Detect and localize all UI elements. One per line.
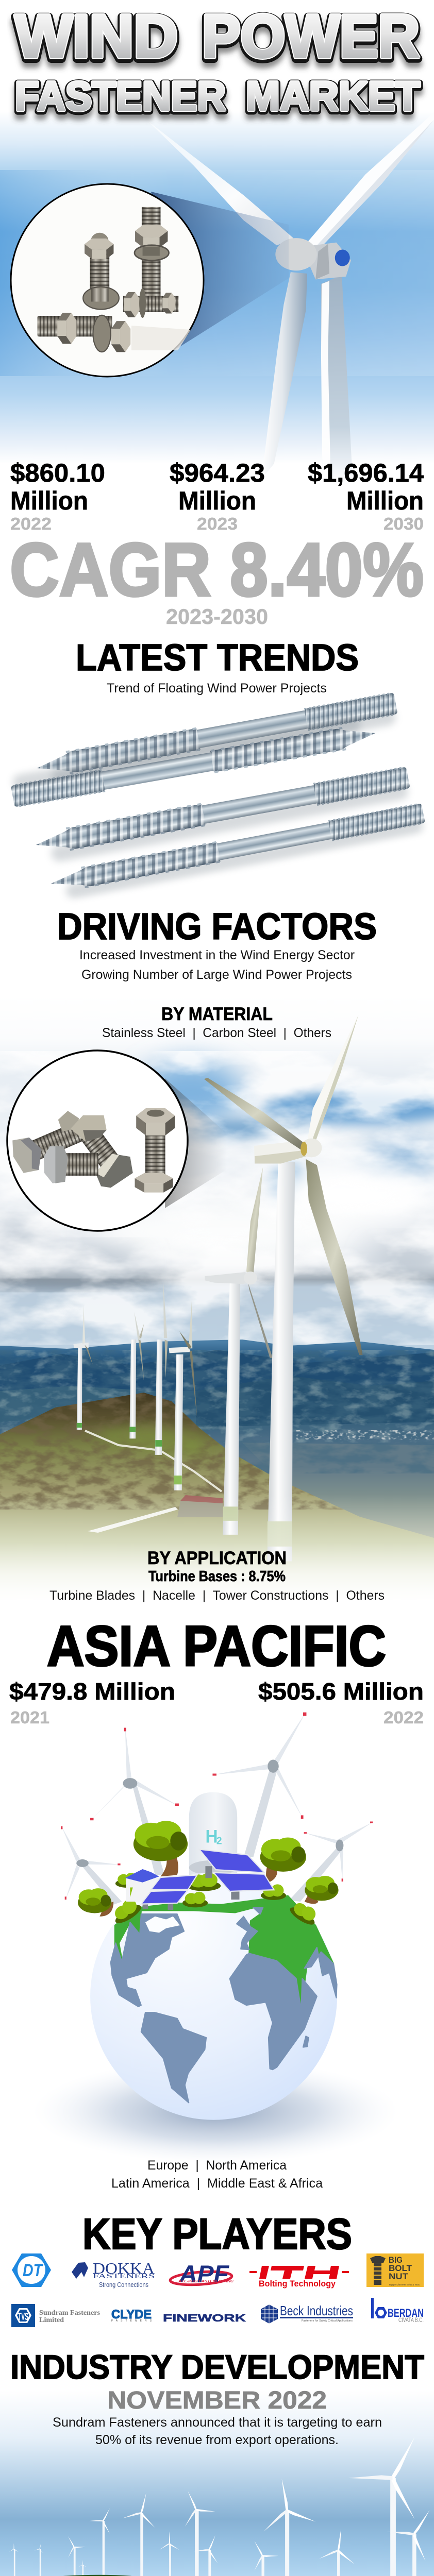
near ridges — [0, 1350, 434, 1468]
logo: Dokka Fasteners: FASTENERS — [93, 2272, 155, 2280]
cloud texture — [0, 1051, 434, 1345]
title: wind power fastener market: MARKET — [246, 73, 420, 119]
logo: Dokka Fasteners: Strong Connections — [99, 2281, 148, 2289]
white fade — [0, 1494, 434, 1602]
grassy hilltop — [88, 1425, 206, 1455]
logo: Finework: FINEWORK — [163, 2313, 246, 2324]
turbine B — [212, 1712, 306, 1857]
market value 2023: 2023 — [197, 514, 238, 533]
logo: All-Pro Fasteners: APF — [179, 2260, 229, 2287]
title: wind power fastener market: WIND — [15, 3, 178, 71]
white road — [88, 1507, 178, 1533]
image: threaded screws — [9, 692, 427, 902]
title: wind power fastener market: MARKET — [246, 74, 420, 120]
logo: Beck Industries: Fasteners for Safety Critical Applications — [302, 2319, 353, 2323]
title: wind power fastener market: FASTENER — [15, 73, 226, 119]
heading: latest trends: LATEST TRENDS — [76, 637, 359, 679]
regional value 2022: 2022 — [383, 1708, 424, 1727]
logo: TVS Sundram Fasteners: TVS — [18, 2311, 28, 2323]
logo: Dokka Fasteners — [72, 2259, 155, 2289]
hero sky background — [0, 0, 434, 464]
market value 2030: 2030 — [383, 514, 424, 533]
logo: Dokka Fasteners: DOKKA — [93, 2259, 155, 2277]
regions list: Latin America | Middle East & Africa — [111, 2176, 323, 2191]
logo: Oberdan Civata: CIVATA B.C. — [398, 2316, 424, 2324]
regional value 2022: $505.6 Million — [258, 1678, 424, 1705]
heading: driving factors: DRIVING FACTORS — [57, 906, 377, 947]
latest trends text: Trend of Floating Wind Power Projects — [107, 681, 327, 696]
bottom sky — [0, 2391, 434, 2576]
heading: by material: BY MATERIAL — [161, 1004, 273, 1024]
hill texture — [0, 1393, 344, 1510]
logo: Beck Industries: Beck Industries — [280, 2303, 353, 2318]
mountain texture — [0, 1350, 434, 1473]
heading: key players: KEY PLAYERS — [82, 2210, 352, 2258]
turbine A — [90, 1727, 179, 1875]
regional value 2021: 2021 — [10, 1708, 49, 1727]
logo: Oberdan Civata — [371, 2298, 424, 2324]
farmhouse — [177, 1495, 223, 1517]
farm road — [85, 1431, 222, 1492]
ground shadow — [33, 2060, 398, 2163]
regions list — [111, 2158, 323, 2191]
hill — [0, 1393, 434, 1602]
market value 2023: $964.23 — [170, 459, 265, 487]
development description: Sundram Fasteners announced that it is targeting to earn — [53, 2415, 382, 2430]
callout circle: hex bolts — [7, 1050, 188, 1231]
logo: DT: DT — [23, 2261, 44, 2280]
title: wind power fastener market: POWER — [202, 4, 420, 72]
logo: Clyde Fasteners: CLYDE — [111, 2308, 152, 2321]
trees and bushes — [78, 1821, 339, 1928]
driving factors list — [79, 948, 355, 982]
regions list: Europe | North America — [147, 2158, 287, 2173]
logo: Big Bolt Nut: NUT — [389, 2272, 409, 2281]
logo: Beck Industries — [261, 2303, 353, 2324]
market value 2023: Million — [178, 486, 256, 515]
market value 2022: 2022 — [10, 514, 52, 533]
market value 2022 — [10, 459, 105, 533]
regional value 2021 — [9, 1678, 175, 1727]
market value 2030: Million — [346, 486, 424, 515]
illustration: green energy globe — [33, 1712, 398, 2163]
title: wind power fastener market: POWER — [202, 3, 420, 71]
development description: 50% of its revenue from export operations. — [95, 2433, 339, 2447]
market value 2030: $1,696.14 — [308, 459, 424, 487]
panel: hero with turbine and title — [0, 0, 434, 485]
solar panels — [141, 1849, 274, 1910]
driving factors list: Growing Number of Large Wind Power Projects — [81, 968, 352, 982]
regional value 2022 — [258, 1678, 424, 1727]
regional value 2021: $479.8 Million — [9, 1678, 175, 1705]
logo: TVS Sundram Fasteners — [11, 2304, 101, 2327]
market value 2022: Million — [10, 486, 88, 515]
mountains — [0, 1340, 434, 1551]
heading: asia pacific: ASIA PACIFIC — [47, 1615, 386, 1678]
valley fields texture — [0, 1350, 434, 1443]
title: wind power fastener market: FASTENER — [15, 73, 226, 119]
logo: ITH Bolting Technology — [249, 2266, 349, 2289]
callout wedge to bolts — [165, 1078, 227, 1208]
title: wind power fastener market: WIND — [15, 4, 178, 72]
turbine C — [61, 1826, 122, 1905]
title: wind power fastener market: WIND — [15, 3, 178, 71]
foreground large turbine — [204, 1015, 362, 1561]
hydrogen tank: 2 — [216, 1835, 222, 1847]
hydrogen tank — [189, 1792, 237, 1878]
title: wind power fastener market: FASTENER — [15, 74, 226, 120]
driving factors list: Increased Investment in the Wind Energy Sector — [79, 948, 355, 962]
material segments: Stainless Steel | Carbon Steel | Others — [102, 1026, 331, 1040]
title: wind power fastener market: POWER — [202, 3, 420, 71]
charging station — [125, 1869, 159, 1902]
sky tint — [0, 170, 434, 376]
turbine D — [289, 1822, 373, 1902]
panel: company logos — [11, 2253, 424, 2327]
market value 2030 — [308, 459, 424, 533]
logo: Big Bolt Nut: BIG — [389, 2255, 403, 2265]
town — [296, 1430, 434, 1439]
development description — [53, 2415, 382, 2447]
panel: bottom wind farm landscape — [0, 2391, 434, 2576]
green landmass — [115, 1896, 333, 2010]
illustration: large wind turbine — [148, 112, 434, 485]
globe — [90, 1873, 337, 2120]
leading application segment: Turbine Bases : 8.75% — [148, 1568, 286, 1585]
market value 2022: $860.10 — [10, 459, 105, 487]
heading: by application: BY APPLICATION — [147, 1548, 287, 1568]
cloudy sky — [0, 994, 434, 1360]
turbine row — [9, 2416, 434, 2576]
logo: TVS Sundram Fasteners: Sundram Fasteners — [39, 2309, 101, 2317]
logo: Big Bolt Nut: Bigger Diameter Bolts & Nuts — [389, 2283, 420, 2286]
application segments: Turbine Blades | Nacelle | Tower Constructions | Others — [49, 1588, 385, 1603]
callout wedge to bolts — [151, 192, 289, 348]
small turbines — [73, 1282, 197, 1490]
CAGR period: 2023-2030 — [166, 604, 268, 629]
development date: NOVEMBER 2022 — [107, 2387, 327, 2414]
green hill — [0, 2575, 434, 2576]
logo: TVS Sundram Fasteners: Limited — [39, 2316, 64, 2324]
logo: Clyde Fasteners: FASTENERS — [111, 2319, 152, 2323]
logo: Big Bolt Nut: BOLT — [389, 2263, 412, 2273]
logo: Big Bolt Nut — [366, 2253, 424, 2287]
greenland — [145, 1917, 180, 1933]
hydrogen tank: H — [205, 1826, 218, 1847]
callout circle: nuts and bolts — [11, 184, 204, 377]
market value 2023 — [170, 459, 265, 533]
title: wind power fastener market: MARKET — [246, 73, 420, 119]
logo: DT — [12, 2253, 51, 2287]
logo: All-Pro Fasteners: ALL-PRO FASTENERS INC — [178, 2279, 234, 2283]
continents — [111, 1908, 337, 2103]
title: wind power fastener market — [15, 3, 420, 120]
blue sky patches — [0, 1061, 434, 1289]
panel: wind farm landscape — [0, 994, 434, 1602]
logo: ITH Bolting Technology: Bolting Technology — [259, 2279, 336, 2289]
second large turbine — [205, 1167, 273, 1535]
